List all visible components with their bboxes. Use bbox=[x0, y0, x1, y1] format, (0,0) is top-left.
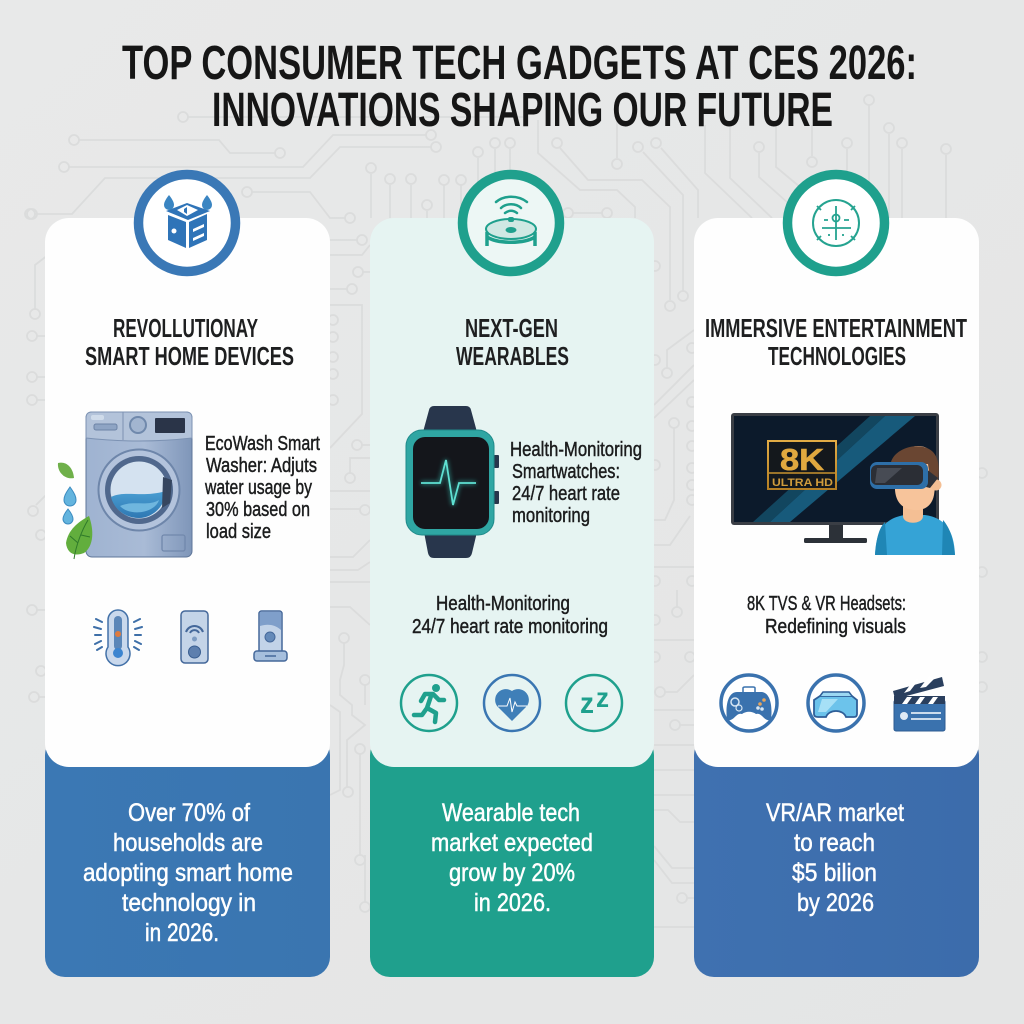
icon: clapperboard bbox=[893, 676, 945, 731]
icon: game controller bbox=[721, 675, 777, 731]
badge: 8K Ultra HD: ULTRA HD bbox=[772, 477, 833, 489]
icon: running bbox=[401, 675, 457, 731]
stat text: households are bbox=[113, 829, 263, 857]
badge: 8K Ultra HD bbox=[768, 441, 836, 489]
icon: smart speaker bbox=[254, 611, 287, 661]
stat text: to reach bbox=[794, 829, 875, 857]
heading: SMART HOME DEVICES bbox=[85, 341, 294, 371]
stat text: $5 bilion bbox=[792, 859, 877, 887]
icon: sleep: z bbox=[580, 687, 594, 720]
heading bbox=[85, 313, 294, 371]
icon: smart thermostat bbox=[94, 610, 142, 666]
text: smartwatch description: 24/7 heart rate bbox=[512, 483, 620, 505]
text: EcoWash description: load size bbox=[206, 521, 271, 543]
text: EcoWash description: EcoWash Smart bbox=[205, 433, 320, 455]
stat panel background bbox=[694, 735, 979, 977]
panel: smart home devices bbox=[45, 174, 330, 977]
stat text: in 2026. bbox=[474, 889, 551, 917]
stat panel background bbox=[370, 735, 654, 977]
text: EcoWash description: 30% based on bbox=[206, 499, 310, 521]
icon: smart home box badge bbox=[138, 174, 236, 272]
text: 8K caption: Redefining visuals bbox=[765, 616, 906, 638]
icon: sleep bbox=[566, 675, 622, 731]
heading: NEXT-GEN bbox=[465, 313, 558, 343]
panel: wearables bbox=[370, 174, 654, 977]
icon: sleep: z bbox=[596, 682, 609, 713]
text: EcoWash description bbox=[204, 433, 320, 543]
text: 8K caption: 8K TVS & VR Headsets: bbox=[747, 593, 906, 615]
text: EcoWash description: Washer: Adjuts bbox=[206, 455, 317, 477]
icon: robot vacuum badge bbox=[462, 174, 560, 272]
stat text: by 2026 bbox=[797, 889, 874, 917]
stat text: technology in bbox=[122, 889, 256, 917]
stat text: grow by 20% bbox=[449, 859, 575, 887]
stat text: VR/AR market bbox=[766, 799, 904, 827]
stat panel background bbox=[45, 735, 330, 977]
stat text bbox=[431, 799, 593, 917]
stat text: adopting smart home bbox=[83, 859, 293, 887]
card background bbox=[370, 218, 654, 767]
text: smartwatch description: Health-Monitoring bbox=[510, 439, 642, 461]
heading: REVOLLUTIONAY bbox=[113, 313, 258, 343]
stat text bbox=[766, 799, 904, 917]
text: health monitoring caption bbox=[412, 593, 608, 638]
title bbox=[122, 37, 917, 137]
illustration: 8K TV with VR viewer bbox=[731, 413, 955, 555]
stat text: in 2026. bbox=[145, 919, 219, 947]
text: smartwatch description: monitoring bbox=[512, 505, 590, 527]
card background bbox=[694, 218, 979, 767]
text: 8K caption bbox=[747, 593, 906, 638]
heading: TECHNOLOGIES bbox=[768, 341, 906, 371]
illustration: smartwatch bbox=[406, 406, 499, 558]
heading bbox=[705, 313, 967, 371]
card background bbox=[45, 218, 330, 767]
heading bbox=[456, 313, 569, 371]
stat text: market expected bbox=[431, 829, 593, 857]
stat text: Wearable tech bbox=[442, 799, 580, 827]
stat text bbox=[83, 799, 293, 947]
badge: 8K Ultra HD: 8K bbox=[780, 442, 825, 477]
stat text: Over 70% of bbox=[128, 799, 250, 827]
text: health monitoring caption: 24/7 heart rate monitoring bbox=[412, 616, 608, 638]
text: EcoWash description: water usage by bbox=[204, 477, 312, 499]
illustration: smart washer bbox=[58, 412, 192, 559]
text: health monitoring caption: Health-Monitoring bbox=[436, 593, 570, 615]
panel: immersive entertainment bbox=[694, 174, 979, 977]
heading: WEARABLES bbox=[456, 341, 569, 371]
icon: heart rate bbox=[484, 675, 540, 731]
figure: person in VR headset bbox=[870, 446, 955, 555]
icon: VR goggles bbox=[808, 675, 864, 731]
text: smartwatch description: Smartwatches: bbox=[512, 461, 620, 483]
icon: video doorbell bbox=[181, 611, 208, 663]
icon: target badge bbox=[788, 174, 884, 272]
text: smartwatch description bbox=[510, 439, 642, 527]
